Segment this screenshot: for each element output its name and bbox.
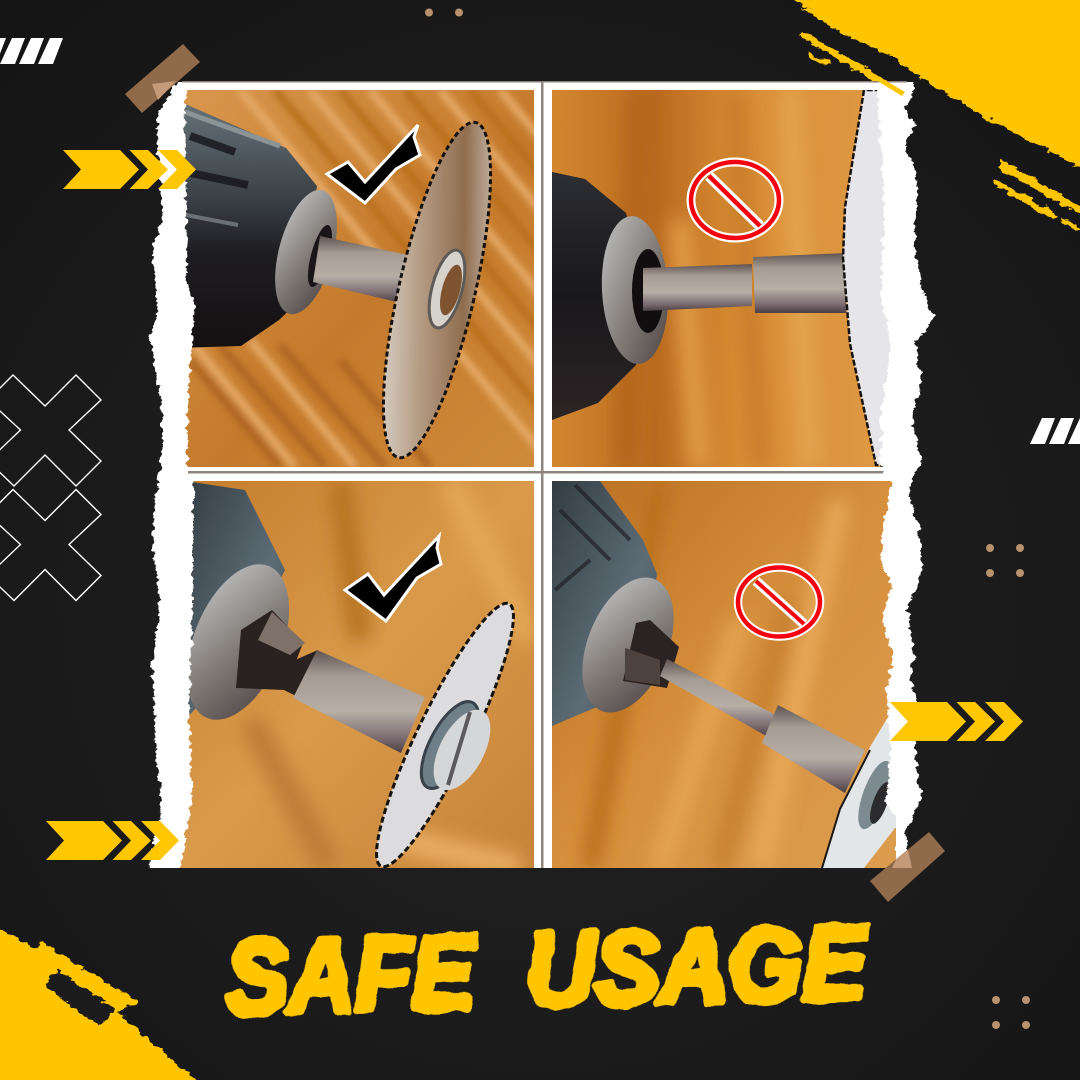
drill body [176,100,317,348]
decorative dots: right [986,544,1024,577]
title: SAFE [225,915,478,1037]
decorative dots: bottom right [992,996,1030,1029]
decorative white stripes: right [1030,418,1080,444]
icon: prohibition sign [738,568,820,636]
chuck collar [582,578,674,712]
saw disc [382,120,492,460]
drill body [185,481,285,720]
title: USAGE [525,905,870,1029]
shaft [313,236,408,303]
wood grain [590,481,840,868]
chuck collar [602,216,668,364]
chuck collar [188,564,290,720]
thin shaft [660,659,778,737]
collar sleeve [753,253,846,313]
torn white paper [146,70,934,880]
icon: check mark [345,536,441,621]
decorative outline crosses [0,375,101,600]
panel: correct usage, bottom left [166,481,534,878]
panel: correct usage, top left [183,90,534,467]
chevron arrow: right [890,702,1023,741]
brush stroke: top right [783,0,1080,232]
panel: incorrect usage, top right [552,90,900,467]
chuck jaws [236,610,303,690]
title [225,905,870,1037]
brush stroke streak over paper corner [866,70,905,96]
saw disc [375,602,515,868]
drill body [552,172,636,420]
disc bolt [428,248,466,330]
brush stroke: bottom left [0,926,203,1080]
wood grain [625,90,810,467]
tape: bottom right [870,832,945,902]
torn paper overlay: left and right photo edges [170,84,908,872]
wood grain [188,90,534,467]
saw disc [823,717,896,868]
icon: prohibition sign [691,162,779,238]
drill body [552,481,657,726]
thin shaft [643,264,752,311]
tape: top left [125,44,200,113]
wood grain [250,481,530,868]
shaft [293,650,425,753]
panel: incorrect usage, bottom right [552,481,920,868]
disc bolt [420,700,480,790]
decorative white stripes: top left [0,38,63,64]
decorative dots: top [425,8,463,16]
collar sleeve [762,705,865,793]
chevron arrow: lower left [46,821,179,860]
chevron arrow: upper left [63,150,196,189]
chuck jaws [623,620,679,688]
chuck collar [275,190,337,314]
icon: check mark [327,125,420,203]
saw disc [842,90,891,467]
frame lines [182,81,907,868]
